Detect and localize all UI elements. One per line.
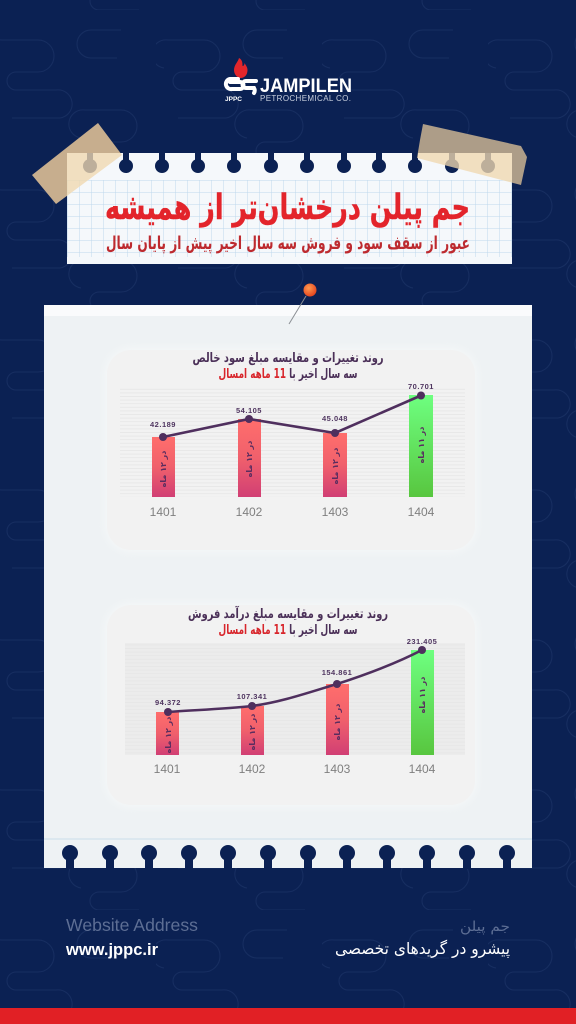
trend line	[159, 392, 425, 441]
value labels: 154.861	[322, 668, 352, 677]
value labels	[155, 637, 437, 707]
value labels: 45.048	[322, 414, 348, 423]
panel: sales revenue chart	[107, 605, 475, 805]
icon: tape sections over paper	[67, 153, 512, 196]
year labels: 1403	[322, 505, 349, 519]
value labels: 54.105	[236, 406, 262, 415]
logo: Jampilen	[225, 58, 352, 103]
logo tagline: PETROCHEMICAL CO.	[260, 94, 351, 103]
panel: title note paper	[67, 153, 512, 264]
year labels: 1404	[409, 762, 436, 776]
value labels: 42.189	[150, 420, 176, 429]
year labels: 1401	[150, 505, 177, 519]
footer: company tagline: پیشرو در گریدهای تخصصی	[335, 939, 510, 959]
footer red bar	[0, 1008, 576, 1024]
icon: flame	[234, 58, 248, 78]
icon: push pin	[289, 284, 316, 324]
bar chart: در ۱۲ ماه	[248, 714, 257, 750]
footer: website address: www.jppc.ir	[65, 940, 158, 959]
chart subtitle: سه سال اخیر با 11 ماهه امسال	[218, 623, 358, 638]
icon: company mark	[226, 79, 256, 93]
value labels: 94.372	[155, 698, 181, 707]
grid	[125, 643, 465, 755]
bar chart	[152, 395, 433, 497]
bar chart: در ۱۲ ماه	[164, 717, 173, 753]
bar chart: در ۱۲ ماه	[159, 451, 168, 487]
logo small letters: JPPC	[225, 96, 242, 103]
value labels	[150, 382, 434, 429]
grid	[120, 387, 465, 497]
bottom binding holes	[62, 845, 515, 869]
trend line	[164, 646, 426, 716]
bar chart: در ۱۱ ماه	[418, 677, 427, 713]
panel: net profit chart	[107, 350, 475, 550]
footer: company tagline: جم پیلن	[460, 919, 510, 935]
paper binding holes	[83, 153, 495, 173]
value labels: 107.341	[237, 692, 267, 701]
chart subtitle: سه سال اخیر با 11 ماهه امسال	[218, 367, 358, 382]
panel: main paper sheet	[44, 305, 532, 869]
bar chart	[156, 650, 434, 755]
bar chart: در ۱۲ ماه	[245, 441, 254, 477]
bar chart: در ۱۲ ماه	[333, 704, 342, 740]
footer: company tagline	[335, 919, 510, 959]
icon: right tape	[417, 124, 527, 185]
value labels: 231.405	[407, 637, 437, 646]
year labels	[150, 505, 435, 519]
chart title: روند تغییرات و مقایسه مبلغ سود خالص	[192, 351, 384, 366]
year labels	[154, 762, 436, 776]
year labels: 1401	[154, 762, 181, 776]
bar chart: در ۱۲ ماه	[331, 448, 340, 484]
icon: left tape	[32, 123, 122, 204]
year labels: 1403	[324, 762, 351, 776]
footer: website address: Website Address	[66, 915, 198, 935]
chart title: روند تغییرات و مقایسه مبلغ درآمد فروش	[188, 605, 388, 622]
footer: website address	[65, 915, 198, 959]
year labels: 1404	[408, 505, 435, 519]
logo wordmark: JAMPILEN	[260, 76, 352, 97]
bar chart: در ۱۱ ماه	[417, 427, 426, 463]
value labels: 70.701	[408, 382, 434, 391]
year labels: 1402	[239, 762, 266, 776]
year labels: 1402	[236, 505, 263, 519]
